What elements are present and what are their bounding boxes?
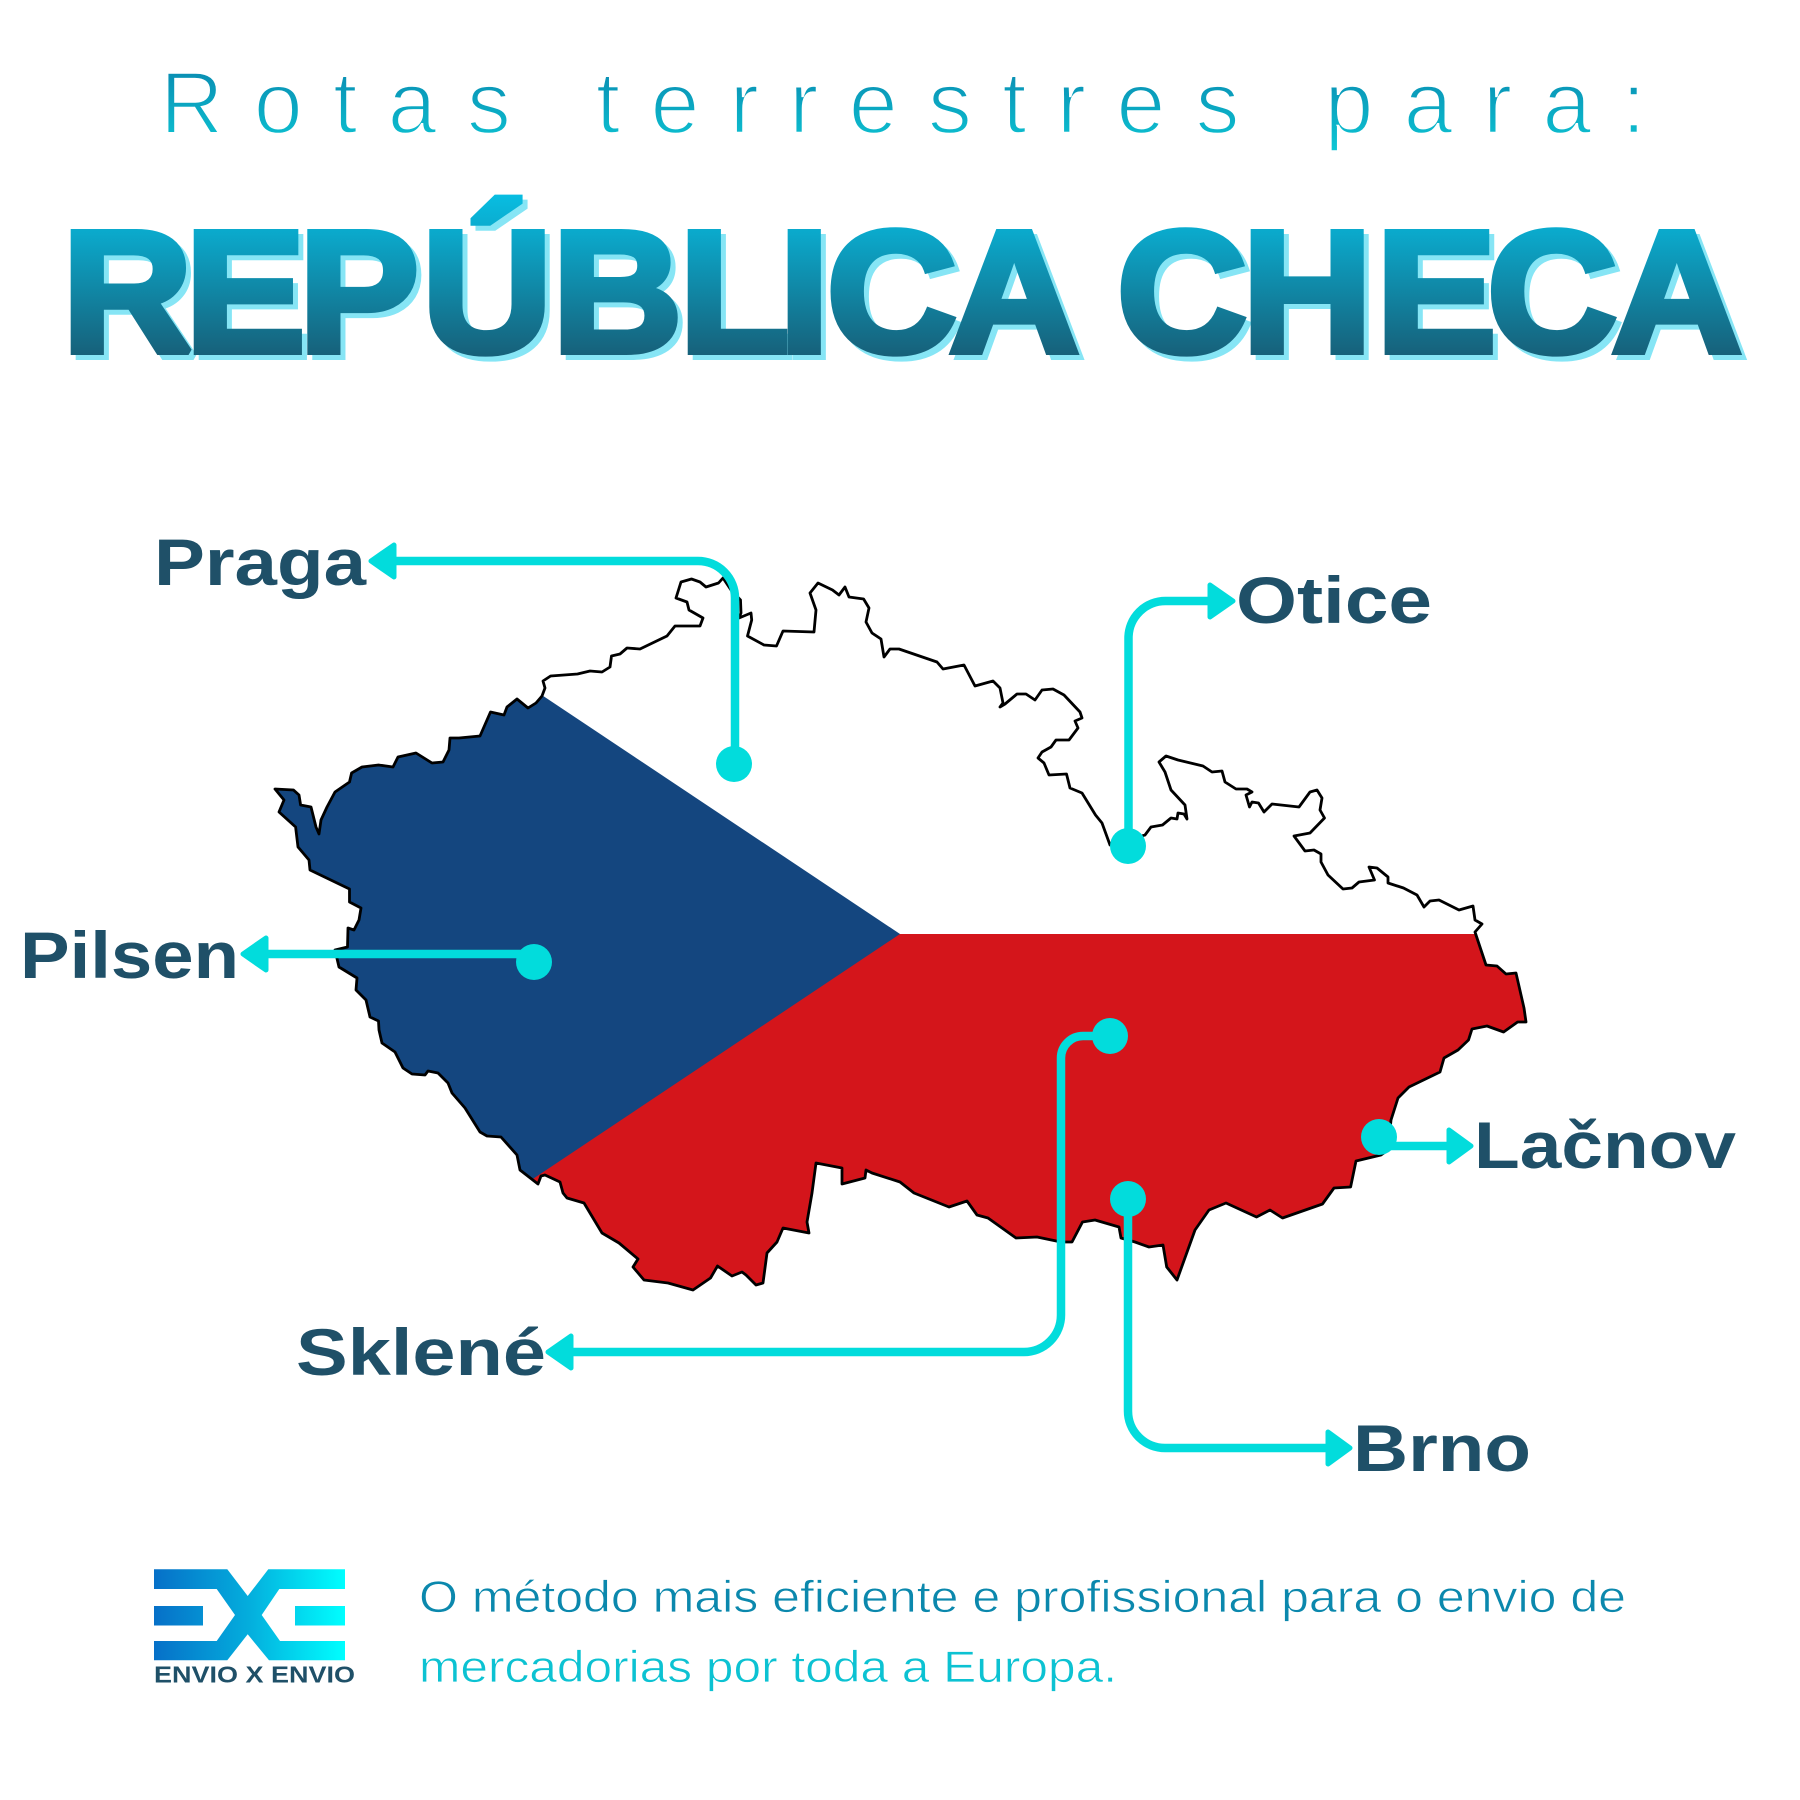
connector: Otice — [1110, 585, 1233, 864]
footer text — [419, 1573, 1626, 1692]
map: Czech Republic flag shape — [274, 576, 1528, 1292]
footer line 2: mercadorias por toda a Europa. — [419, 1643, 1117, 1692]
country outline — [275, 578, 1526, 1290]
title main text: REPÚBLICA CHECA — [62, 196, 1742, 389]
title: República Checa — [62, 196, 1747, 394]
flag fill clipped to the country — [278, 696, 1524, 1288]
subtitle: Rotas terrestres para: Rotas terrestres para: — [160, 53, 1646, 152]
label: Pilsen: Pilsen — [20, 918, 239, 992]
label: Sklené: Sklené — [296, 1315, 546, 1389]
logo mark — [154, 1569, 345, 1660]
connector: Brno — [1110, 1181, 1350, 1464]
logo wordmark: ENVIO X ENVIO — [154, 1662, 355, 1688]
label: Otice: Otice — [1236, 563, 1432, 637]
connector: Sklené — [548, 1018, 1128, 1368]
connector: Lačnov — [1361, 1119, 1471, 1162]
connector: Pilsen — [243, 938, 552, 980]
connector: Praga — [371, 545, 752, 782]
logo: Envio X Envio — [154, 1569, 355, 1688]
label: Praga: Praga — [154, 525, 367, 599]
label: Brno: Brno — [1353, 1411, 1531, 1485]
footer line 1: O método mais eficiente e profissional para o envio de — [419, 1573, 1626, 1622]
title shadow: REPÚBLICA CHECA — [67, 201, 1747, 394]
label: Lačnov: Lačnov — [1474, 1108, 1736, 1182]
